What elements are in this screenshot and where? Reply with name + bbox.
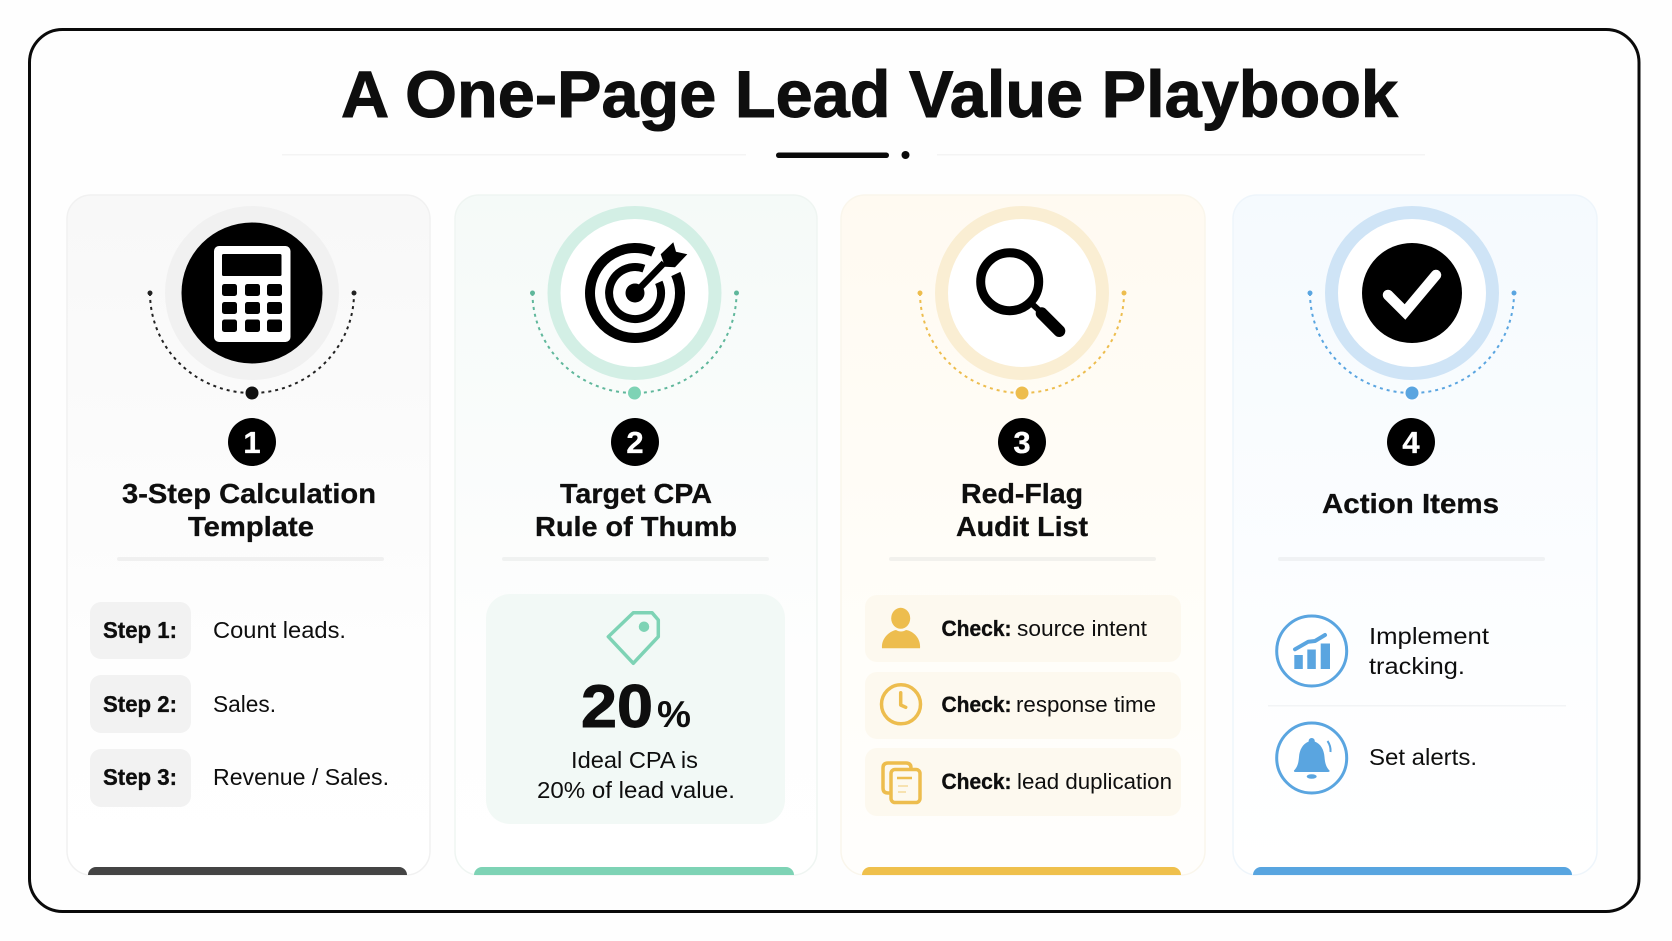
icon: calculator: [165, 206, 339, 380]
step 1: Count leads.: [213, 617, 346, 643]
step 2: [90, 675, 276, 733]
heading: Target CPA: [560, 478, 712, 509]
caption: [537, 747, 735, 803]
action: implement tracking: [1277, 616, 1490, 686]
heading: Rule of Thumb: [535, 511, 737, 542]
dotted arc: [148, 290, 356, 400]
callout: 20 percent: [486, 594, 785, 824]
step 3: Step 3:: [103, 764, 177, 790]
heading: Audit List: [956, 511, 1088, 542]
big number: %: [657, 694, 691, 735]
panel: 3-step calculation template: [67, 195, 430, 875]
big number: 20: [581, 673, 653, 740]
step 2: Sales.: [213, 691, 276, 717]
action: implement tracking: tracking.: [1369, 653, 1465, 679]
heading: Action Items: [1322, 488, 1499, 519]
heading: [535, 478, 737, 542]
heading: Template: [188, 511, 314, 542]
number badge 2: [611, 418, 659, 466]
number badge 4: [1387, 418, 1435, 466]
icon: duplicate documents: [883, 763, 920, 802]
step 3: [90, 749, 389, 807]
check: response time: [865, 672, 1181, 739]
action: set alerts: [1277, 723, 1477, 793]
check: source intent: [865, 595, 1181, 662]
step 1: [90, 602, 346, 659]
number badge 1: [228, 418, 276, 466]
check: source intent: source intent: [1017, 616, 1147, 641]
icon: person: [882, 608, 920, 648]
icon: rising bar chart: [1277, 616, 1347, 686]
icon: clock: [882, 685, 920, 724]
number badge 3: 3: [1013, 425, 1031, 460]
icon: target and arrow: [554, 212, 715, 374]
heading: Red-Flag: [961, 478, 1083, 509]
number badge 2: 2: [626, 425, 644, 460]
accent bar: [88, 867, 407, 875]
accent bar: [474, 867, 794, 875]
dotted arc: [530, 290, 739, 400]
accent bar: [862, 867, 1181, 875]
icon: magnifying glass: [942, 212, 1102, 374]
action: set alerts: Set alerts.: [1369, 744, 1477, 770]
check: lead duplication: [865, 748, 1181, 816]
panel: target CPA rule of thumb: [455, 195, 817, 875]
number badge 3: [998, 418, 1046, 466]
step 3: Revenue / Sales.: [213, 764, 389, 790]
panel: action items: [1233, 195, 1597, 875]
check: source intent: Check:: [942, 616, 1012, 641]
caption: Ideal CPA is: [571, 747, 698, 773]
big number: [581, 673, 691, 740]
check: lead duplication: Check:: [942, 769, 1012, 794]
check: lead duplication: lead duplication: [1017, 769, 1172, 794]
heading: [122, 478, 376, 542]
dotted arc: [1308, 290, 1516, 400]
step 1: Step 1:: [103, 617, 177, 643]
title: A One-Page Lead Value Playbook: [341, 57, 1398, 131]
title divider: [282, 151, 1425, 159]
icon: price tag: [608, 613, 658, 663]
icon: bell: [1277, 723, 1347, 793]
action: implement tracking: Implement: [1369, 623, 1490, 649]
heading: 3-Step Calculation: [122, 478, 376, 509]
icon: check mark: [1332, 212, 1492, 374]
caption: 20% of lead value.: [537, 777, 735, 803]
check: response time: response time: [1016, 692, 1156, 717]
accent bar: [1253, 867, 1572, 875]
number badge 1: 1: [243, 425, 261, 460]
check: response time: Check:: [942, 692, 1012, 717]
panel: red-flag audit list: [841, 195, 1205, 875]
step 2: Step 2:: [103, 691, 177, 717]
dotted arc: [918, 290, 1126, 400]
heading: [956, 478, 1088, 542]
number badge 4: 4: [1402, 425, 1420, 460]
